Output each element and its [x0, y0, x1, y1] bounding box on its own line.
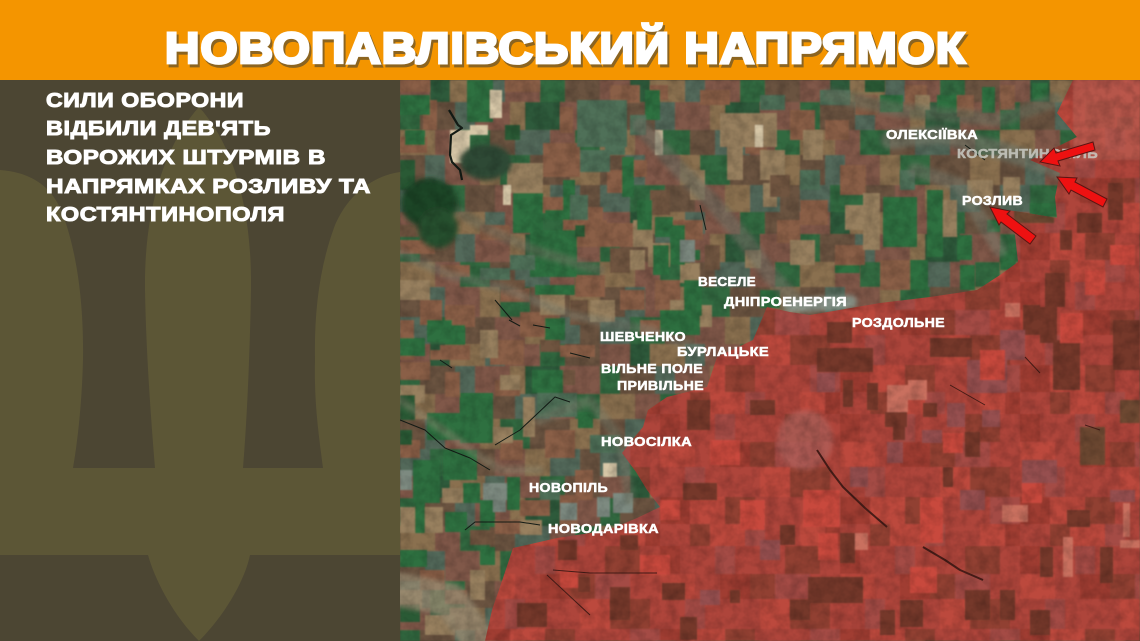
town labels: ВІЛЬНЕ ПОЛЕ	[601, 362, 703, 376]
headline text: СИЛИ ОБОРОНИ	[46, 90, 244, 112]
trident emblem	[0, 107, 400, 641]
town labels: ДНІПРОЕНЕРГІЯ	[724, 295, 847, 309]
rivers	[400, 110, 985, 530]
town labels: КОСТЯНТИНОПІЛЬ	[957, 147, 1098, 161]
town labels: НОВОПІЛЬ	[529, 481, 608, 495]
town labels: ПРИВІЛЬНЕ	[617, 379, 704, 393]
headline text: КОСТЯНТИНОПОЛЯ	[46, 204, 285, 226]
farm fields	[395, 80, 1057, 635]
russian-occupied zone in red	[485, 80, 1140, 641]
town labels: ОЛЕКСІЇВКА	[886, 127, 978, 142]
headline text: ВОРОЖИХ ШТУРМІВ В	[46, 147, 326, 169]
town labels: ШЕВЧЕНКО	[600, 330, 686, 344]
town and river valley bands	[400, 95, 1060, 641]
town labels	[529, 127, 1098, 536]
title: НОВОПАВЛІВСЬКИЙ НАПРЯМОК	[165, 22, 966, 73]
town labels: ВЕСЕЛЕ	[698, 275, 756, 289]
title banner	[0, 0, 1140, 80]
attack arrows	[990, 142, 1107, 244]
left panel	[0, 80, 400, 641]
town labels: НОВОСІЛКА	[601, 435, 692, 449]
headline text	[46, 90, 371, 226]
forests	[401, 144, 512, 248]
town labels: РОЗЛИВ	[962, 194, 1023, 208]
headline text: ВІДБИЛИ ДЕВ'ЯТЬ	[46, 118, 271, 140]
red-zone gullies	[547, 357, 1100, 615]
town labels: БУРЛАЦЬКЕ	[677, 345, 769, 359]
headline text: НАПРЯМКАХ РОЗЛИВУ ТА	[46, 176, 371, 198]
satellite map	[395, 80, 1140, 641]
town labels: НОВОДАРІВКА	[548, 522, 659, 536]
town labels: РОЗДОЛЬНЕ	[852, 316, 945, 330]
